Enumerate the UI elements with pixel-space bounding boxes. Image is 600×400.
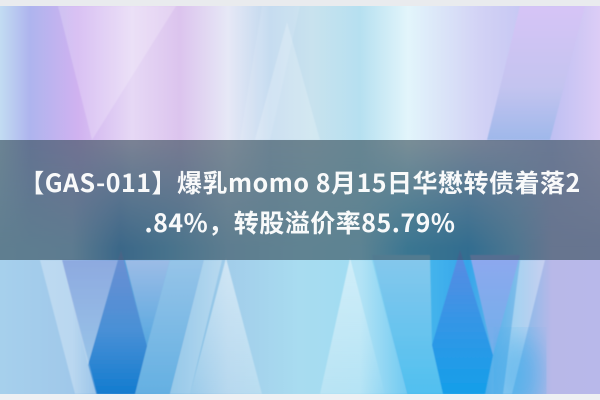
title text: 【GAS-011】爆乳momo 8月15日华懋转债着落2	[19, 164, 581, 200]
title text: .84%，转股溢价率85.79%	[145, 204, 455, 240]
top edge strip	[0, 0, 600, 6]
title band	[0, 140, 600, 260]
bottom edge strip	[0, 394, 600, 400]
title text	[19, 164, 581, 240]
